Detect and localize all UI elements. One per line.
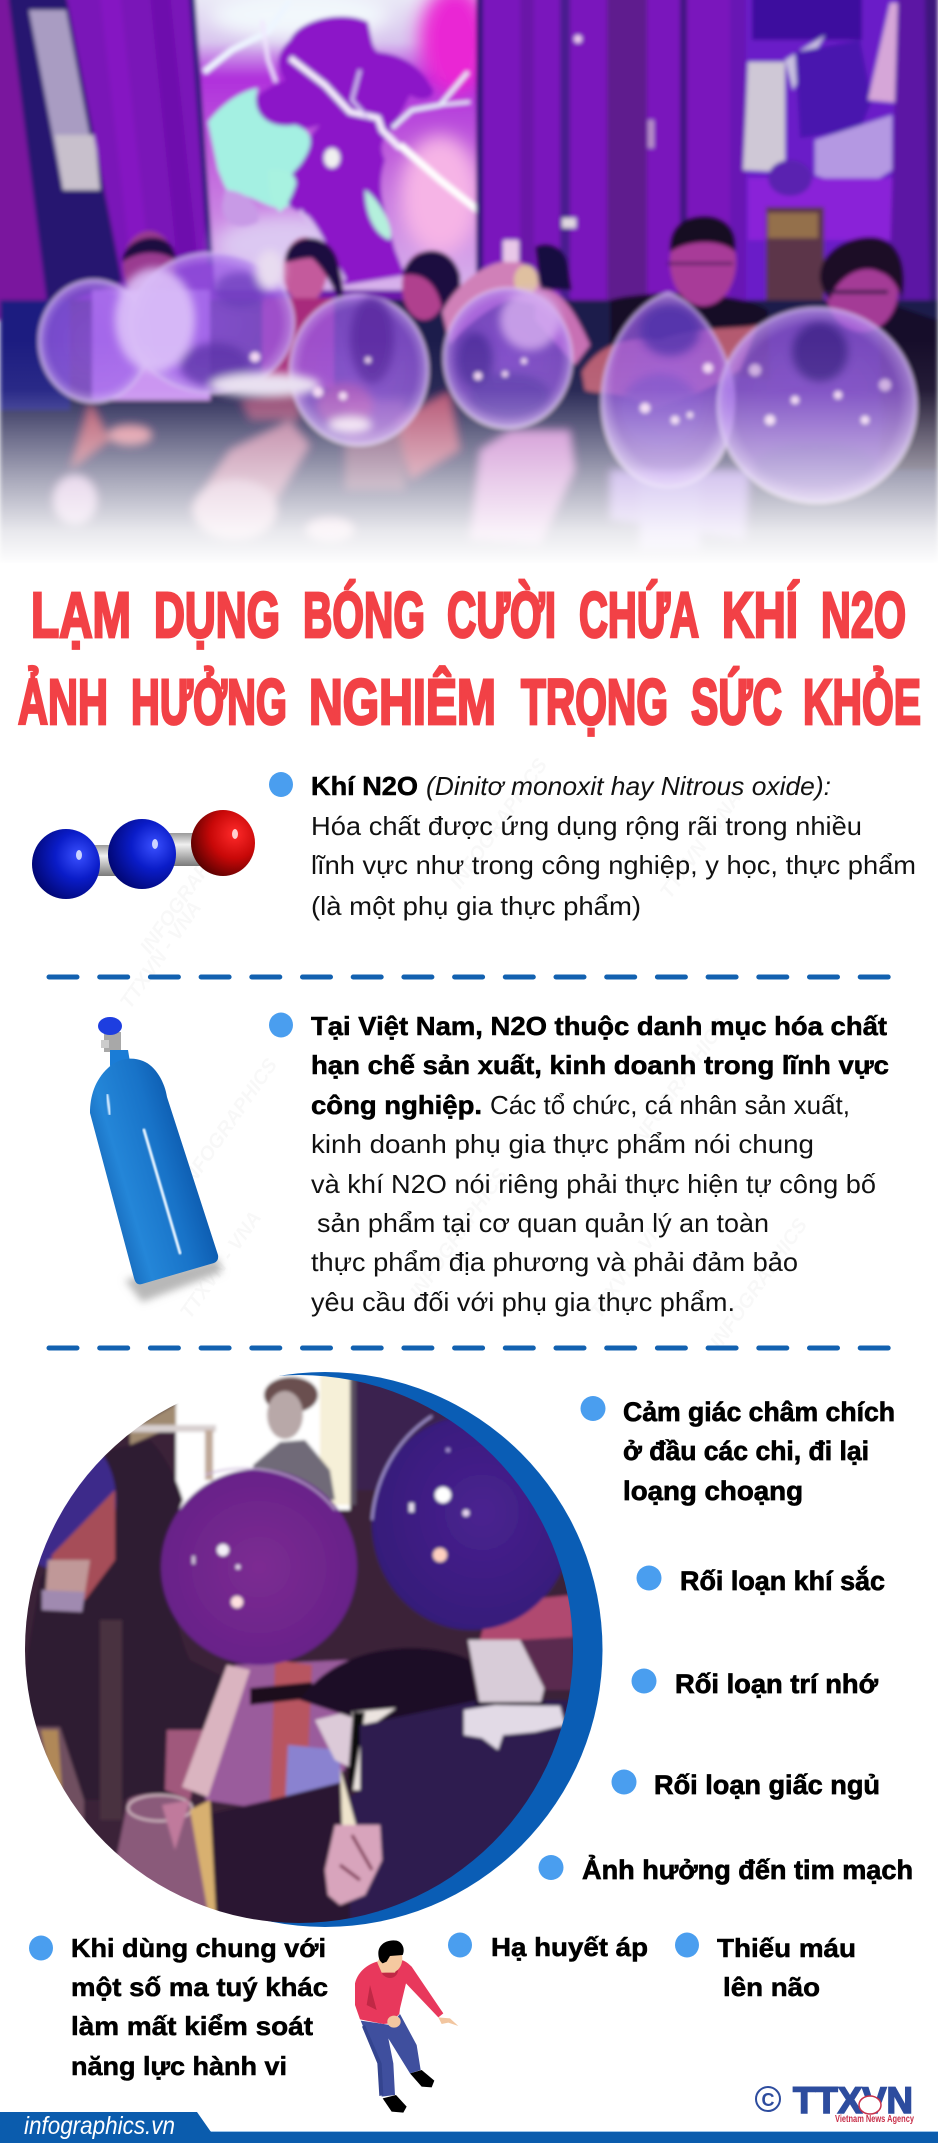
person 1	[121, 229, 175, 286]
watermarks: INFOGRAPHICS	[706, 1214, 812, 1353]
person 4 with phone	[535, 244, 572, 290]
icon: N2O molecule	[32, 810, 255, 899]
symptom: cardiovascular: Ảnh hưởng đến tim mạch	[582, 1853, 913, 1885]
regulation lines: thực phẩm địa phương và phải đảm bảo	[311, 1247, 798, 1277]
title: HƯỞNG	[131, 665, 287, 738]
definition lines: (là một phụ gia thực phẩm)	[311, 891, 641, 921]
title: CHỨA	[579, 579, 699, 651]
title: NGHIÊM	[309, 665, 496, 738]
symptom: loss of behaviour control: Khi dùng chung với	[71, 1933, 326, 1963]
regulation lines: Tại Việt Nam, N2O thuộc danh mục hóa chất	[311, 1011, 887, 1041]
blue crescent behind circular photo	[48, 1372, 602, 1927]
balloon interior patches	[110, 250, 852, 438]
watermarks: INFOGRAPHICS	[176, 1054, 282, 1193]
definition lines	[311, 771, 916, 921]
logo: TTXVN	[756, 2080, 914, 2125]
watermarks	[116, 754, 812, 1353]
left dark figure and dim balloon	[26, 1441, 220, 1820]
right dark figure	[205, 1595, 580, 1930]
logo: TTXVN: TTXVN	[793, 2080, 913, 2121]
symptom: tingling: ở đầu các chi, đi lại	[623, 1436, 869, 1466]
regulation lines: hạn chế sản xuất, kinh doanh trong lĩnh vực	[311, 1050, 889, 1080]
symptom: cerebral anaemia	[675, 1932, 856, 2002]
white fade	[0, 369, 938, 563]
text block: N2O definition	[269, 771, 916, 921]
symptom: sleep: Rối loạn giấc ngủ	[654, 1770, 880, 1800]
icon: dizzy man	[355, 1940, 458, 2113]
definition lines: Khí N2O	[311, 771, 418, 801]
watermarks: TTXVN - VNA	[586, 1207, 676, 1323]
footer band with site tab	[0, 2112, 938, 2143]
person 2	[283, 237, 327, 303]
logo: TTXVN: C	[762, 2090, 774, 2110]
definition lines: (Dinitơ monoxit hay Nitrous oxide):	[426, 771, 831, 801]
watermarks: INFOGRAPHICS	[406, 1164, 512, 1303]
circular photo of balloon users	[4, 1370, 580, 1930]
symptom list: right column	[538, 1396, 913, 1885]
watermarks: INFOGRAPHICS	[446, 754, 552, 893]
symptom: loss of behaviour control: làm mất kiểm soát	[71, 2011, 313, 2041]
symptom: loss of behaviour control: một số ma tuý khác	[71, 1972, 328, 2002]
watermarks: INFOGRAPHICS	[626, 1014, 732, 1153]
bullet	[269, 1012, 293, 1038]
symptom: tingling	[580, 1396, 895, 1506]
regulation lines: yêu cầu đối với phụ gia thực phẩm.	[311, 1287, 735, 1317]
background: wall and standing person	[128, 1375, 448, 1514]
crowd of people	[0, 216, 938, 570]
title: TRỌNG	[521, 666, 668, 738]
skirts and arms below	[53, 385, 750, 550]
person 3	[402, 252, 446, 320]
site name: infographics.vn	[24, 2112, 175, 2140]
definition lines: Hóa chất được ứng dụng rộng rãi trong nhiều	[311, 811, 862, 841]
symptom: tingling: loạng choạng	[623, 1476, 803, 1506]
watermarks: INFOGRAPHICS	[136, 819, 242, 958]
symptom: loss of behaviour control	[29, 1933, 328, 2081]
title: KHÍ	[722, 579, 800, 651]
centre outfit	[165, 1648, 480, 1810]
hand holding balloon stem	[325, 1768, 382, 1905]
title: LẠM	[31, 579, 131, 651]
symptom: memory: Rối loạn trí nhớ	[675, 1669, 879, 1699]
symptom list: bottom row	[29, 1932, 856, 2081]
mural with figure and lightning	[195, 0, 491, 290]
title: DỤNG	[154, 579, 280, 651]
logo: TTXVN: Vietnam News Agency	[835, 2114, 914, 2125]
symptom: tingling: Cảm giác châm chích	[623, 1397, 895, 1427]
regulation lines: Các tổ chức, cá nhân sản xuất,	[490, 1090, 850, 1120]
wine glasses	[30, 1727, 216, 1920]
text block: regulation in Vietnam	[269, 1011, 889, 1317]
title: BÓNG	[303, 579, 425, 651]
definition lines: lĩnh vực như trong công nghiệp, y học, thực phẩm	[311, 850, 916, 880]
watermarks: TTXVN - VNA	[176, 1207, 266, 1323]
symptom: loss of behaviour control: năng lực hành vi	[71, 2051, 287, 2081]
right curtain	[476, 0, 751, 305]
title	[18, 579, 921, 738]
watermarks: TTXVN - VNA	[656, 787, 746, 903]
title: ẢNH	[18, 665, 108, 738]
right window scene	[743, 0, 938, 320]
regulation lines: công nghiệp.	[311, 1090, 482, 1120]
regulation lines	[311, 1011, 889, 1317]
bullet	[269, 772, 293, 797]
symptom: cerebral anaemia: Thiếu máu	[717, 1933, 856, 1963]
regulation lines: sản phẩm tại cơ quan quản lý an toàn	[317, 1208, 769, 1238]
panel: hero photo of people with balloons	[0, 0, 938, 571]
watermarks: TTXVN - VNA	[116, 897, 206, 1013]
purple balloons	[161, 1416, 572, 1665]
regulation lines: kinh doanh phụ gia thực phẩm nói chung	[311, 1129, 814, 1159]
regulation lines: và khí N2O nói riêng phải thực hiện tự công bố	[311, 1169, 876, 1199]
symptom: mood: Rối loạn khí sắc	[680, 1565, 885, 1596]
title: SỨC	[691, 666, 782, 738]
title: CƯỜI	[447, 579, 556, 651]
left curtain and dark doorway	[0, 0, 224, 320]
icon: blue gas cylinder	[90, 1017, 222, 1302]
person 6 man with glasses	[880, 300, 938, 470]
balloon sparkles	[250, 352, 891, 425]
person 5 man with glasses	[610, 293, 770, 380]
symptom: cerebral anaemia: lên não	[723, 1972, 820, 2002]
symptom: low blood pressure: Hạ huyết áp	[491, 1932, 648, 1962]
six balloons	[39, 250, 916, 502]
